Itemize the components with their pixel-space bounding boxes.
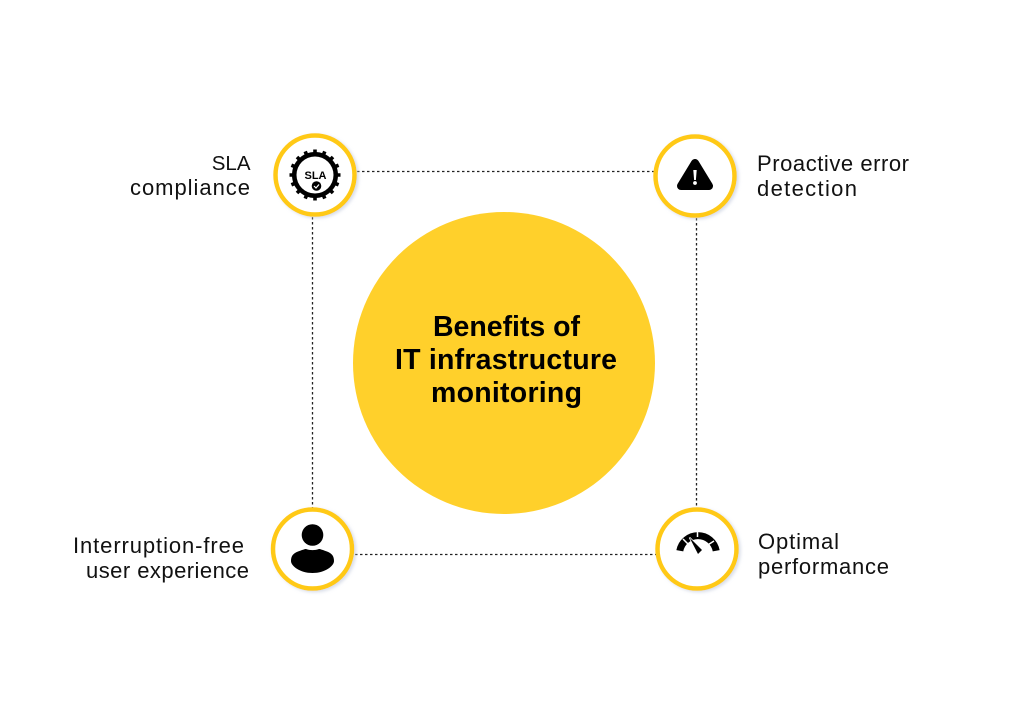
- label: SLA compliance: SLA: [212, 152, 251, 175]
- label: Interruption-free user experience: user experience: [86, 558, 249, 583]
- icon: SLA gear: SLA: [304, 170, 327, 182]
- node: SLA compliance icon: [276, 136, 354, 214]
- label: Optimal performance: Optimal: [758, 529, 839, 554]
- title: IT infrastructure: [395, 344, 617, 376]
- node: interruption-free user experience icon: [273, 510, 352, 588]
- label: Optimal performance: [758, 529, 889, 579]
- title: monitoring: [431, 377, 582, 409]
- node: optimal performance icon: [658, 510, 736, 588]
- label: Proactive error detection: Proactive error: [757, 151, 909, 176]
- icon: user: [291, 524, 334, 573]
- dotted connector: left: [312, 217, 314, 508]
- icon: warning triangle: [681, 163, 709, 186]
- label: Interruption-free user experience: Interruption-free: [73, 533, 244, 558]
- dotted connector: bottom: [355, 554, 656, 556]
- label: SLA compliance: compliance: [130, 175, 250, 200]
- label: Optimal performance: performance: [758, 554, 889, 579]
- label: Proactive error detection: [757, 151, 909, 201]
- label: SLA compliance: [130, 152, 251, 200]
- dotted connector: right: [696, 218, 698, 507]
- label: Proactive error detection: detection: [757, 176, 857, 201]
- title: Benefits of: [433, 311, 580, 343]
- node: proactive error detection icon: [656, 136, 734, 216]
- central circle: [353, 212, 655, 514]
- title: [395, 311, 617, 409]
- icon: gauge: [680, 530, 716, 554]
- label: Interruption-free user experience: [73, 533, 249, 583]
- dotted connector: top: [357, 170, 654, 172]
